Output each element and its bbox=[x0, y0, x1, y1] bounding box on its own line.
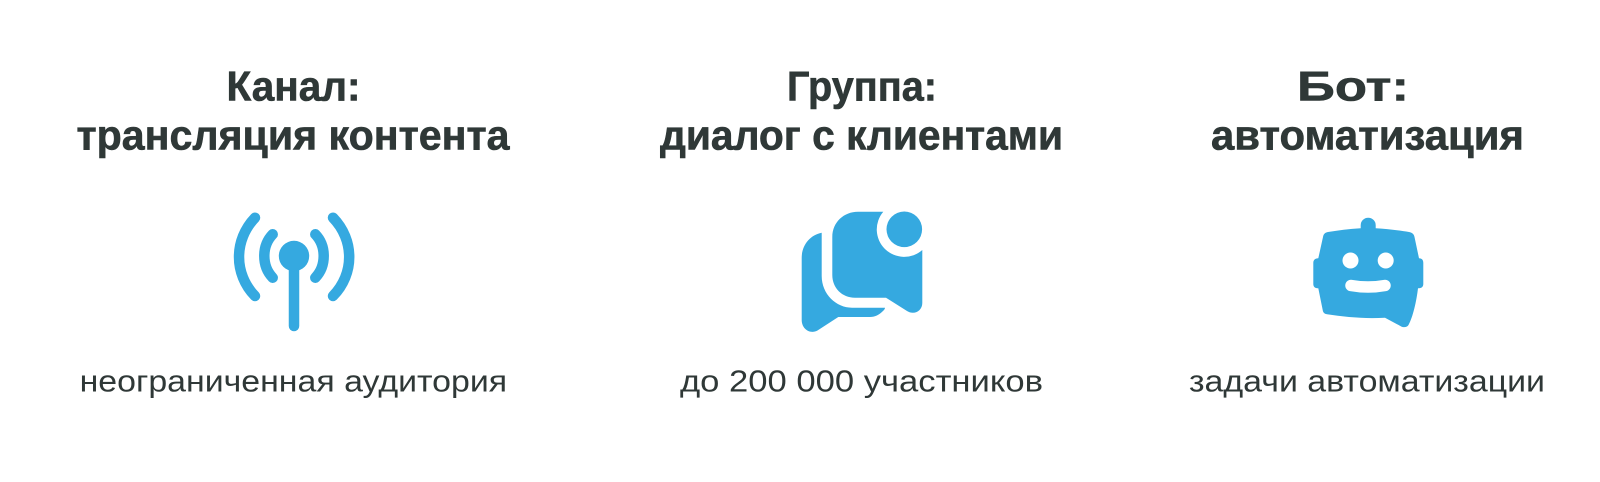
heading: group: Группа: bbox=[787, 63, 937, 110]
heading: bot: Бот: bbox=[1297, 63, 1409, 110]
icon: robot bbox=[1313, 218, 1423, 327]
panel: channel bbox=[76, 63, 510, 399]
panel: bot bbox=[1189, 63, 1545, 399]
text: bot caption: задачи автоматизации bbox=[1189, 364, 1545, 399]
text: group caption: до 200 000 участников bbox=[680, 364, 1043, 399]
heading: group bbox=[660, 63, 1063, 158]
heading: bot: автоматизация bbox=[1211, 112, 1524, 158]
icon: antenna bbox=[239, 218, 349, 326]
heading: channel: Канал: bbox=[226, 63, 360, 110]
panel: group bbox=[660, 63, 1063, 399]
icon: chat bubbles bbox=[802, 212, 922, 332]
heading: group: диалог с клиентами bbox=[660, 112, 1063, 158]
heading: channel bbox=[76, 63, 510, 158]
text: channel caption: неограниченная аудитория bbox=[80, 364, 507, 399]
heading: bot bbox=[1211, 63, 1524, 158]
heading: channel: трансляция контента bbox=[76, 112, 510, 158]
